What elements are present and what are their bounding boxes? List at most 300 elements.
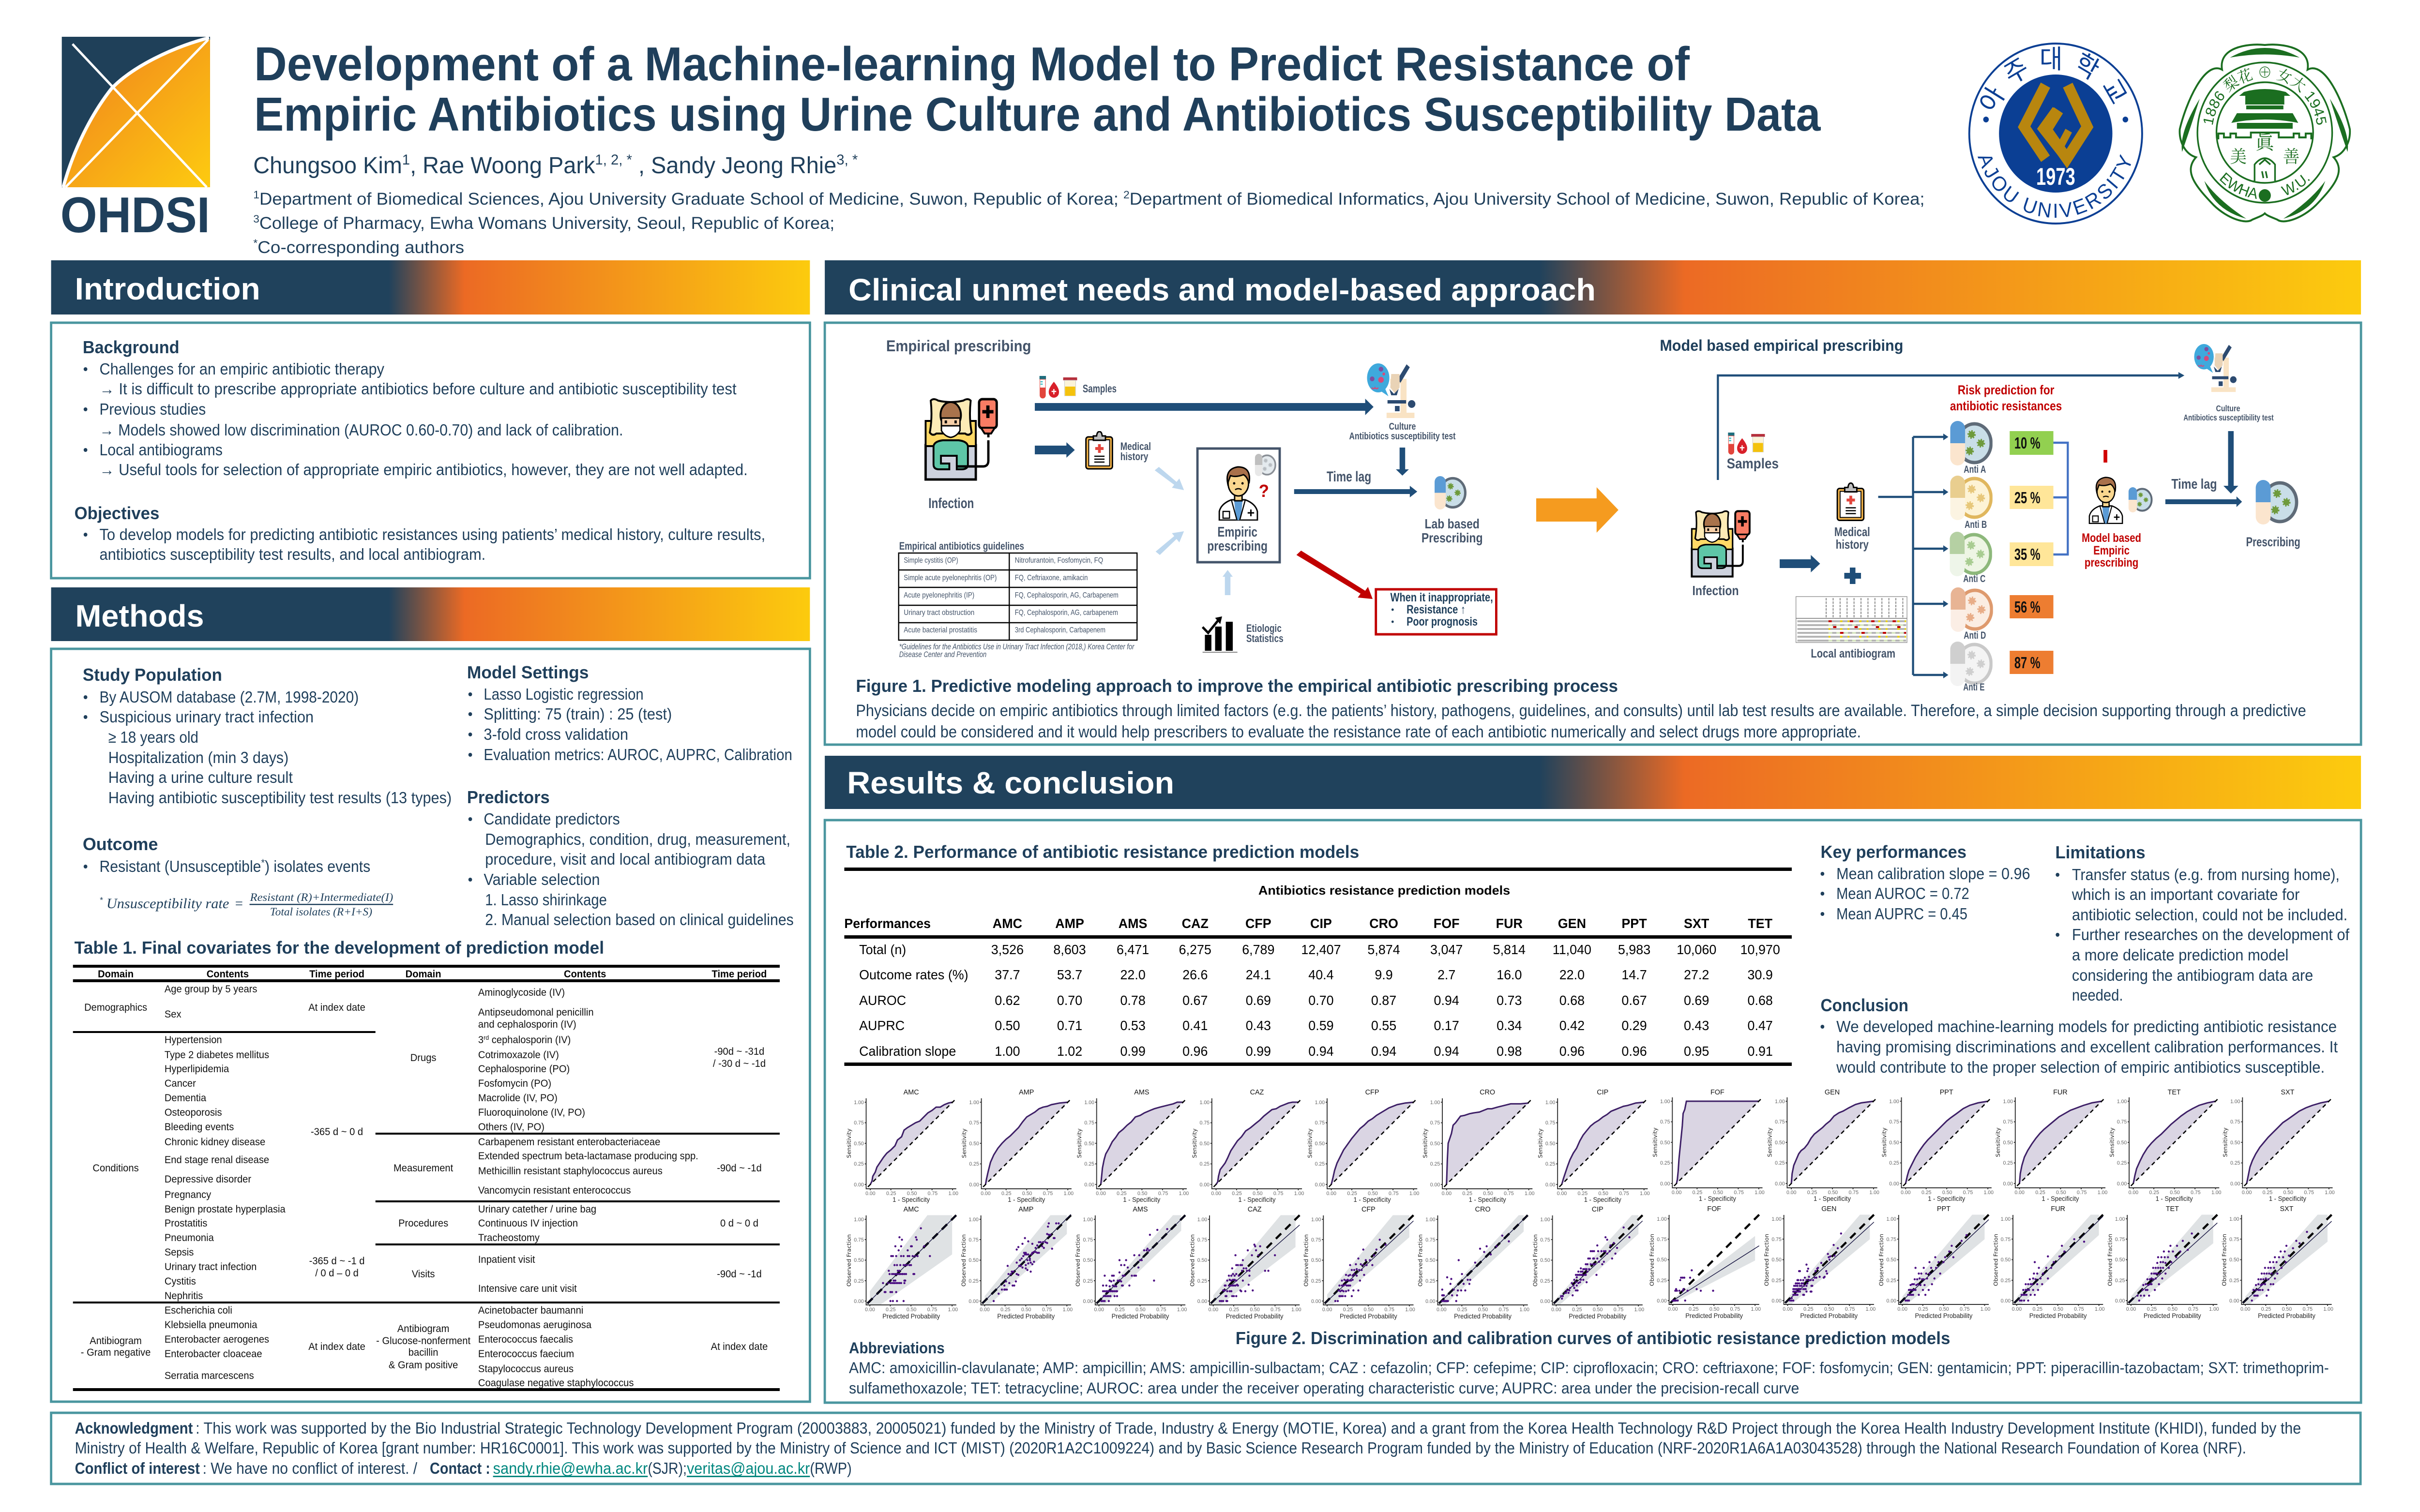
chart: calibration CAZ: CAZ [1248, 1206, 1262, 1213]
table: Empirical antibiotics guidelines: Simple cystitis (OP) [904, 556, 958, 565]
table 2: model performance: 0.68 [1748, 992, 1773, 1008]
chart: ROC SXT: 0.50 [2230, 1140, 2240, 1146]
table 2: model performance: SXT [1684, 915, 1709, 931]
chart: calibration TET: Observed Fraction [2107, 1234, 2113, 1286]
table 1: covariates: - Glucose-nonferment [376, 1335, 470, 1347]
text block: Study Population: Study Population [83, 665, 222, 685]
chart: calibration GEN: GEN [1821, 1205, 1836, 1213]
authors: 1, 2, * [595, 151, 632, 168]
text block: Model Settings: Splitting: 75 (train) : 25 (test) [484, 705, 672, 723]
text block: Predictors: 2. Manual selection based on clinical guidelines [485, 911, 794, 928]
chart: calibration TET: 1.00 [2115, 1216, 2125, 1222]
chart: calibration FOF: Observed Fraction [1649, 1234, 1655, 1286]
table 1: covariates [73, 965, 780, 1391]
chart: calibration GEN: Observed Fraction [1763, 1234, 1770, 1286]
label: Risk prediction: Risk prediction for [1958, 383, 2054, 397]
affiliations: 2 [1123, 189, 1130, 201]
labels: Anti A to E: Anti D [1964, 630, 1986, 641]
label: Model based Empiric prescribing [2082, 532, 2141, 569]
chart: ROC SXT: 1.00 [2230, 1099, 2240, 1105]
label: Etiologic Statistics: Etiologic [1246, 622, 1282, 634]
chart: ROC FUR: 1.00 [2003, 1099, 2013, 1105]
table 2: model performance: 8,603 [1053, 942, 1086, 957]
text block: Background bullets: Local antibiograms [99, 441, 223, 459]
text block: Outcome: ) isolates events [265, 857, 370, 875]
chart: ROC PPT: 0.75 [1889, 1119, 1899, 1125]
chart: calibration FUR [1993, 1205, 2104, 1319]
table 1: covariates: At index date [308, 1341, 365, 1352]
chart: ROC AMS: 0.25 [1084, 1161, 1094, 1167]
logo: Ewha Womans University: 善 [2283, 143, 2299, 168]
authors: Chungsoo Kim [253, 152, 399, 178]
chart: ROC SXT: Sensitivity [2222, 1127, 2229, 1157]
text block: Objectives: To develop models for predicting antibiotic resistances using patients’ medical history, culture results, [99, 525, 765, 543]
table 2: model performance: 27.2 [1684, 967, 1709, 982]
chart: ROC FUR: 0.50 [2003, 1140, 2013, 1146]
table 2: model performance: 10,060 [1677, 942, 1716, 957]
table 1: covariates: Intensive care unit visit [478, 1283, 577, 1294]
chart: calibration SXT: 0.75 [2229, 1237, 2239, 1243]
chart: ROC CFP: 1.00 [1315, 1100, 1325, 1106]
table 1: covariates: - Gram negative [81, 1347, 151, 1358]
callout: When it inappropriate: Resistance ↑ [1407, 603, 1466, 616]
risk chip: 56% [2010, 595, 2054, 618]
table: Empirical antibiotics guidelines: Acute pyelonephritis (IP) [904, 591, 974, 599]
chart: ROC AMP: 0.75 [969, 1120, 979, 1126]
chart: ROC CFP: 1 - Specificity [1354, 1196, 1391, 1203]
table: Empirical antibiotics guidelines: FQ, Ceftriaxone, amikacin [1015, 574, 1088, 582]
logo: Ewha Womans University: 美 [2230, 143, 2247, 168]
chart: calibration CFP [1303, 1206, 1415, 1320]
table 2: model performance: 0.91 [1748, 1043, 1773, 1059]
arrow: time lag [1294, 486, 1417, 497]
chart: calibration CRO [1417, 1206, 1529, 1320]
chart: calibration AMS: 0.25 [1083, 1278, 1093, 1284]
table 1: covariates: At index date [711, 1341, 768, 1352]
chart: calibration CRO: 0.25 [1425, 1278, 1436, 1284]
text block: Conflict of interest and contact [75, 1459, 852, 1477]
chart: calibration AMS: 1.00 [1083, 1217, 1093, 1223]
chart: ROC GEN: GEN [1825, 1089, 1840, 1096]
chart: calibration AMP: 0.00 0.25 0.50 0.75 1.00 [980, 1307, 1073, 1313]
label: Culture: Culture [2216, 404, 2240, 413]
table 1: covariates: 0 d ~ 0 d [720, 1218, 758, 1229]
chart: calibration AMP [960, 1206, 1073, 1320]
label: Model based Empiric prescribing: prescribing [2085, 556, 2138, 569]
chart: ROC PPT: 0.00 0.25 0.50 0.75 1.00 [1901, 1190, 1994, 1196]
chart: calibration AMP: Observed Fraction [960, 1234, 967, 1287]
chart: calibration FUR: 0.00 [2001, 1298, 2011, 1304]
chart: calibration AMP: 0.50 [968, 1258, 979, 1263]
table 1: covariates: Escherichia coli [165, 1305, 232, 1316]
label: Infection: Infection [1693, 583, 1739, 598]
label: Time lag: Time lag [2171, 476, 2217, 492]
chart: ROC GEN: 1.00 [1775, 1099, 1785, 1105]
table 2: model performance: 24.1 [1246, 967, 1271, 982]
chart: calibration SXT: 0.25 [2229, 1278, 2239, 1284]
chart: ROC CAZ: 1.00 [1200, 1100, 1210, 1106]
chart: calibration FOF: 0.00 [1657, 1298, 1667, 1304]
table 1: covariates: Contents [207, 969, 249, 980]
callout: When it inappropriate: Poor prognosis [1407, 615, 1478, 629]
chart: calibration CIP: 0.25 [1540, 1278, 1550, 1284]
chart: ROC GEN: 0.75 [1775, 1119, 1785, 1125]
chart: ROC CIP: 0.50 [1545, 1141, 1555, 1147]
chart: ROC AMP: 0.00 0.25 0.50 0.75 1.00 [981, 1191, 1074, 1197]
label: Risk prediction: antibiotic resistances [1950, 399, 2062, 413]
text block: Limitations [2055, 843, 2350, 1004]
table 2: model performance: Performances [844, 915, 931, 931]
table 2: model performance: 6,471 [1117, 942, 1149, 957]
text block: Model Settings: Model Settings [467, 663, 589, 682]
chart: ROC SXT: SXT [2281, 1089, 2294, 1096]
box: Empiric prescribing [1197, 449, 1280, 562]
chart: ROC CFP: CFP [1365, 1089, 1379, 1096]
chart: calibration CAZ: 0.75 [1197, 1237, 1207, 1243]
chart: calibration AMS [1074, 1206, 1187, 1320]
table 2: model performance: 3,047 [1430, 942, 1463, 957]
chart: calibration CIP: 0.75 [1540, 1237, 1550, 1243]
text block: Conclusion: We developed machine-learning models for predicting antibiotic resistance [1836, 1018, 2337, 1035]
table 1: covariates: Antibiogram [90, 1335, 142, 1347]
text block: Acknowledgment: : This work was supported by the Bio Industrial Strategic Technology Development Program (20003883, 20005021) funded by the Ministry of Trade, Industry & Energy (MOTIE, Korea) and a grant from the Korea Health Technology R&D Project through the Korea Health Industry Development Institute (KHIDI), funded by the [196, 1419, 2301, 1437]
caption: Figure 1: Figure 1. Predictive modeling approach to improve the empirical antibiotic prescribing process [856, 676, 1618, 696]
chart: ROC AMS: 1.00 [1084, 1100, 1094, 1106]
text block: Conclusion: would contribute to the proper selection of empiric antibiotics susceptible. [1836, 1058, 2325, 1076]
chart: calibration AMS: AMS [1133, 1206, 1148, 1213]
icon: Anti C [1950, 532, 1991, 576]
chart: ROC CRO: 0.00 [1430, 1182, 1440, 1188]
chart: calibration TET [2107, 1205, 2219, 1319]
chart: calibration AMC: 0.25 [854, 1278, 864, 1284]
panel: Introduction [51, 323, 810, 578]
table 2: model performance: 0.87 [1371, 992, 1396, 1008]
text block: Predictors: 1. Lasso shirinkage [485, 891, 607, 909]
chart: ROC TET: Sensitivity [2109, 1127, 2115, 1157]
table 2: model performance [844, 868, 1792, 1066]
chart: ROC GEN: 0.00 0.25 0.50 0.75 1.00 [1786, 1190, 1879, 1196]
table: Empirical antibiotics guidelines: 3rd Cephalosporin, Carbapenem [1015, 626, 1105, 634]
label: Lab based Prescribing: Lab based [1425, 516, 1480, 531]
chart: ROC CFP: 0.25 [1315, 1161, 1325, 1167]
chart: calibration AMS: Observed Fraction [1074, 1234, 1081, 1287]
table 1: covariates: Enterococcus faecalis [478, 1334, 573, 1345]
chart: ROC SXT: 0.00 [2230, 1181, 2240, 1187]
chart: ROC CRO: 0.25 [1430, 1161, 1440, 1167]
affiliations: 1 [253, 189, 259, 201]
text block: Limitations: considering the antibiogram data are [2072, 966, 2313, 984]
table 2: model performance: 3,526 [991, 942, 1024, 957]
table 1: covariates: Pseudomonas aeruginosa [478, 1319, 592, 1331]
chart: calibration FUR: Predicted Probability [2029, 1312, 2087, 1319]
table 2: model performance: 0.68 [1559, 992, 1585, 1008]
table 1: covariates: -90d ~ -31d [714, 1046, 764, 1057]
icon: small pill dish [2129, 487, 2152, 512]
chart: calibration CIP: 0.00 0.25 0.50 0.75 1.00 [1551, 1307, 1644, 1313]
table: Empirical antibiotics guidelines: Disease Center and Prevention [899, 650, 986, 659]
chart: calibration AMS: 0.50 [1083, 1258, 1093, 1263]
chart: calibration TET: 0.25 [2115, 1278, 2125, 1284]
chart: ROC CIP: Sensitivity [1537, 1128, 1543, 1158]
table 1: covariates: -90d ~ -1d [717, 1269, 762, 1280]
chart: calibration TET: TET [2166, 1205, 2179, 1213]
text block: Conflict of interest and contact: sandy.rhie@ewha.ac.kr [493, 1459, 648, 1477]
table 1: covariates: End stage renal disease [165, 1154, 269, 1166]
section header: Results and conclusion: Results & conclusion [847, 766, 1174, 800]
chart: ROC CIP: 0.00 0.25 0.50 0.75 1.00 [1557, 1191, 1650, 1197]
chart: calibration PPT: PPT [1937, 1205, 1951, 1213]
chart: calibration CAZ: Predicted Probability [1226, 1313, 1284, 1320]
table 2: model performance: 0.78 [1120, 992, 1146, 1008]
arrow: infection to history [1035, 442, 1075, 458]
table 1: covariates: Antibiogram [397, 1323, 449, 1334]
table 1: covariates: Chronic kidney disease [165, 1137, 265, 1148]
table 2: model performance: AMC [993, 915, 1022, 931]
chart: ROC AMP: 1 - Specificity [1008, 1196, 1045, 1203]
chart: ROC CIP: 1.00 [1545, 1100, 1555, 1106]
table 1: covariates: Osteoporosis [165, 1107, 222, 1118]
chart: ROC TET: 0.50 [2117, 1140, 2127, 1146]
chart: ROC CAZ [1191, 1089, 1304, 1203]
text block: Limitations: which is an important covariate for [2072, 885, 2300, 903]
text block: Background bullets [84, 360, 748, 479]
chart: ROC PPT: 1 - Specificity [1928, 1195, 1966, 1202]
text block: Model Settings: Lasso Logistic regression [484, 685, 644, 703]
label: Model based Empiric prescribing: Empiric [2093, 544, 2130, 557]
table 1: covariates: Fluoroquinolone (IV, PO) [478, 1107, 585, 1118]
chart: ROC FOF: 0.50 [1660, 1140, 1670, 1146]
title [254, 38, 1821, 141]
affiliations: College of Pharmacy, Ewha Womans University, Seoul, Republic of Korea; [259, 214, 834, 233]
table 1: covariates: / 0 d – 0 d [315, 1268, 359, 1279]
chart: ROC GEN: 0.50 [1775, 1140, 1785, 1146]
chart: ROC SXT: 0.25 [2230, 1160, 2240, 1166]
chart: calibration AMP: 0.25 [968, 1278, 979, 1284]
table 1: covariates: Age group by 5 years [165, 984, 257, 995]
chart: ROC CAZ: 1 - Specificity [1238, 1196, 1276, 1203]
chart: ROC CRO [1422, 1089, 1535, 1203]
affiliations: Department of Biomedical Sciences, Ajou University Graduate School of Medicine, Suwon, Republic of Korea; [259, 190, 1123, 209]
heading: Background: Background [83, 338, 180, 357]
table 2: model performance: 0.94 [1434, 1043, 1459, 1059]
chart: ROC PPT: 0.25 [1889, 1160, 1899, 1166]
chart: ROC AMP: Sensitivity [961, 1128, 968, 1158]
chart: ROC CIP [1537, 1089, 1650, 1203]
table 2: model performance: AMS [1119, 915, 1147, 931]
chart: calibration AMC: 0.00 0.25 0.50 0.75 1.00 [865, 1307, 958, 1313]
chart: calibration AMC: 1.00 [854, 1217, 864, 1223]
chart: calibration PPT: 0.50 [1886, 1257, 1896, 1263]
text block: Abbreviations [849, 1359, 2329, 1397]
table 2: model performance: 0.59 [1308, 1018, 1334, 1033]
table 2: model performance: 22.0 [1559, 967, 1585, 982]
icon: Anti B [1950, 476, 1991, 520]
table 2: model performance: 0.70 [1308, 992, 1334, 1008]
logo: Ewha Womans University [2179, 44, 2351, 223]
chart: calibration CAZ: Observed Fraction [1189, 1234, 1195, 1287]
chart: ROC AMS: 0.00 0.25 0.50 0.75 1.00 [1096, 1191, 1189, 1197]
table 1: covariates: Hypertension [165, 1034, 222, 1046]
chart: ROC FOF: 0.00 0.25 0.50 0.75 1.00 [1672, 1190, 1765, 1196]
label: Etiologic Statistics: Statistics [1246, 632, 1284, 644]
chart: calibration TET: 0.00 0.25 0.50 0.75 1.00 [2126, 1306, 2219, 1312]
logo: Ajou University: 아주대학교 [1980, 46, 2127, 109]
text block: Background bullets: → Useful tools for selection of appropriate empiric antibiotics, however, they are not well adapted. [99, 461, 748, 479]
table 1: covariates: Acinetobacter baumanni [478, 1305, 583, 1316]
text block: Background bullets: Previous studies [99, 400, 206, 418]
chart: ROC TET: 1.00 [2117, 1099, 2127, 1105]
text block: Conflict of interest and contact: (SJR); [648, 1459, 687, 1477]
risk chip: 87%: 87 % [2014, 654, 2041, 672]
chart: calibration FUR: 1.00 [2001, 1216, 2011, 1222]
chart: calibration FOF: Predicted Probability [1685, 1312, 1743, 1319]
chart: calibration GEN: 0.25 [1771, 1278, 1782, 1284]
authors: , Rae Woong Park [410, 152, 595, 178]
chart: calibration CRO: CRO [1475, 1206, 1491, 1213]
table 1: covariates: cephalosporin (IV) [489, 1034, 571, 1046]
section header: Introduction: Introduction [75, 272, 260, 306]
label: Local antibiogram: Local antibiogram [1811, 647, 1895, 660]
text block: Key performances: Mean AUROC = 0.72 [1836, 884, 1969, 902]
chart: calibration CRO: 0.50 [1425, 1258, 1436, 1263]
chart: ROC AMC: 0.25 [854, 1161, 864, 1167]
text block: Conclusion: Conclusion [1821, 996, 1908, 1015]
callout: When it inappropriate: When it inappropriate, [1391, 591, 1493, 604]
arrow: time lag [2165, 496, 2242, 507]
table 1: covariates: Benign prostate hyperplasia [165, 1204, 286, 1215]
risk chip: 25%: 25 % [2014, 489, 2041, 507]
text block: Predictors: procedure, visit and local antibiogram data [485, 850, 765, 868]
panel: Methods [51, 649, 810, 1402]
chart: calibration FUR: 0.75 [2001, 1237, 2011, 1243]
table 1: covariates: Urinary catether / urine bag [478, 1204, 596, 1215]
table 1: covariates: At index date [308, 1002, 365, 1013]
table 1: covariates: Drugs [410, 1052, 437, 1063]
chart: calibration CFP: 0.25 [1311, 1278, 1321, 1284]
chart: ROC AMP: 0.50 [969, 1141, 979, 1147]
chart: calibration SXT: SXT [2280, 1205, 2293, 1213]
chart: calibration SXT: Predicted Probability [2258, 1312, 2315, 1319]
table 2: model performance: 37.7 [995, 967, 1020, 982]
table 2: model performance: AUROC [859, 992, 906, 1008]
table: Empirical antibiotics guidelines: Nitrofurantoin, Fosfomycin, FQ [1015, 556, 1103, 565]
label: Lab based Prescribing [1422, 516, 1483, 545]
table 1: covariates: Contents [564, 969, 606, 980]
arrow: samples to culture [1035, 399, 1374, 415]
table 1: covariates: Enterobacter aerogenes [165, 1334, 269, 1345]
table 2: model performance: CIP [1310, 915, 1332, 931]
table 2: model performance: 0.99 [1120, 1043, 1146, 1059]
chart: ROC AMP: 0.00 [969, 1182, 979, 1188]
chart: ROC CIP: 1 - Specificity [1584, 1196, 1621, 1203]
chart: calibration CFP: 1.00 [1311, 1217, 1321, 1223]
table 2: model performance: Calibration slope [859, 1043, 956, 1059]
text block: Limitations: Further researches on the development of [2072, 926, 2350, 943]
text block: Study Population: By AUSOM database (2.7M, 1998-2020) [99, 688, 359, 706]
chart: calibration TET: 0.50 [2115, 1257, 2125, 1263]
labels: Anti A to E [1963, 464, 1987, 693]
chart: calibration CFP: 0.75 [1311, 1237, 1321, 1243]
table 2: model performance: 0.94 [1371, 1043, 1396, 1059]
table 1: covariates: Serratia marcescens [165, 1370, 254, 1381]
table 1: covariates: Fosfomycin (PO) [478, 1078, 551, 1089]
text block: Study Population: Suspicious urinary tract infection [99, 708, 314, 726]
chart: calibration CFP: Predicted Probability [1340, 1313, 1397, 1320]
icon: lab dish [1435, 476, 1465, 509]
risk chip: 35% [2010, 542, 2054, 566]
chart: calibration PPT: Predicted Probability [1915, 1312, 1973, 1319]
table 2: model performance: Total (n) [859, 942, 906, 957]
text block: Model Settings [467, 663, 792, 763]
table 2: model performance: Outcome rates (%) [859, 967, 968, 982]
chart: calibration CIP: CIP [1592, 1206, 1603, 1213]
formula: unsusceptibility rate: Resistant (R)+Intermediate(I) [249, 891, 393, 903]
formula: unsusceptibility rate: = [234, 896, 243, 912]
chart: ROC CFP: Sensitivity [1306, 1128, 1313, 1158]
box: Empiric prescribing: Empiric [1217, 524, 1257, 540]
chart: ROC SXT [2222, 1089, 2335, 1202]
chart: ROC FOF: 0.75 [1660, 1119, 1670, 1125]
chart: calibration CAZ: 0.50 [1197, 1258, 1207, 1263]
authors: 3, * [836, 151, 858, 168]
table 2: model performance: TET [1748, 915, 1772, 931]
table: Empirical antibiotics guidelines: FQ, Cephalosporin, AG, carbapenem [1015, 609, 1118, 617]
chart: calibration CRO: 0.00 0.25 0.50 0.75 1.00 [1437, 1307, 1529, 1313]
chart: ROC GEN: 1 - Specificity [1814, 1195, 1851, 1202]
chart: ROC PPT: PPT [1940, 1089, 1953, 1096]
text block: Outcome: Resistant (Unsusceptible [99, 857, 269, 875]
figure 1 left: Empirical prescribing [886, 337, 1496, 659]
table 2: model performance: 5,983 [1618, 942, 1650, 957]
chart: calibration TET: 0.00 [2115, 1298, 2125, 1304]
table 2: model performance: 0.41 [1182, 1018, 1208, 1033]
icon: patient [1692, 511, 1750, 577]
section header: Clinical unmet needs: Clinical unmet needs and model-based approach [848, 273, 1596, 307]
table: Empirical antibiotics guidelines: *Guidelines for the Antibiotics Use in Urinary Tract Infection (2018,) Korea Center for [899, 642, 1135, 651]
chart: ROC SXT: 0.75 [2230, 1119, 2240, 1125]
chart: ROC CRO: 1 - Specificity [1469, 1196, 1506, 1203]
table 1: covariates: Type 2 diabetes mellitus [165, 1049, 269, 1061]
chart: ROC CFP: 0.00 0.25 0.50 0.75 1.00 [1326, 1191, 1419, 1197]
label: Infection: Infection [928, 495, 974, 511]
table 2: model performance: 0.43 [1684, 1018, 1709, 1033]
chart: ROC CRO: 0.00 0.25 0.50 0.75 1.00 [1442, 1191, 1535, 1197]
chart: ROC CFP [1306, 1089, 1419, 1203]
table 2: model performance: CAZ [1182, 915, 1209, 931]
chart: ROC FOF: 0.25 [1660, 1160, 1670, 1166]
section header: Results and conclusion [825, 756, 2361, 809]
table 2: model performance: 14.7 [1621, 967, 1647, 982]
labels: Anti A to E: Anti E [1963, 682, 1984, 693]
table 1: covariates: Cancer [165, 1078, 196, 1089]
text block: Figure 1 description: model could be considered and it would help prescribers to evaluate the resistance rate of each antibiotic numerically and select drugs more appropriate. [856, 723, 1861, 741]
text block: Background bullets: → Models showed low discrimination (AUROC 0.60-0.70) and lack of calibration. [99, 421, 623, 439]
label: Risk prediction [1950, 383, 2062, 413]
chart: ROC CIP: 0.75 [1545, 1120, 1555, 1126]
text block: Study Population: Hospitalization (min 3 days) [108, 749, 288, 766]
section header: Clinical unmet needs [825, 260, 2361, 314]
table 1: covariates: Hyperlipidemia [165, 1063, 229, 1075]
table 1: covariates: Sepsis [165, 1247, 194, 1258]
chart: ROC TET: 1 - Specificity [2156, 1195, 2193, 1202]
table 1: covariates: Cystitis [165, 1276, 196, 1287]
chart: calibration FUR: 0.50 [2001, 1257, 2011, 1263]
table 2: model performance: FUR [1496, 915, 1523, 931]
table 2: model performance: 53.7 [1057, 967, 1082, 982]
arrow: statistics to prescribing [1223, 570, 1233, 595]
chart: calibration CRO: 0.75 [1425, 1237, 1436, 1243]
chart: calibration FOF: FOF [1707, 1205, 1721, 1213]
